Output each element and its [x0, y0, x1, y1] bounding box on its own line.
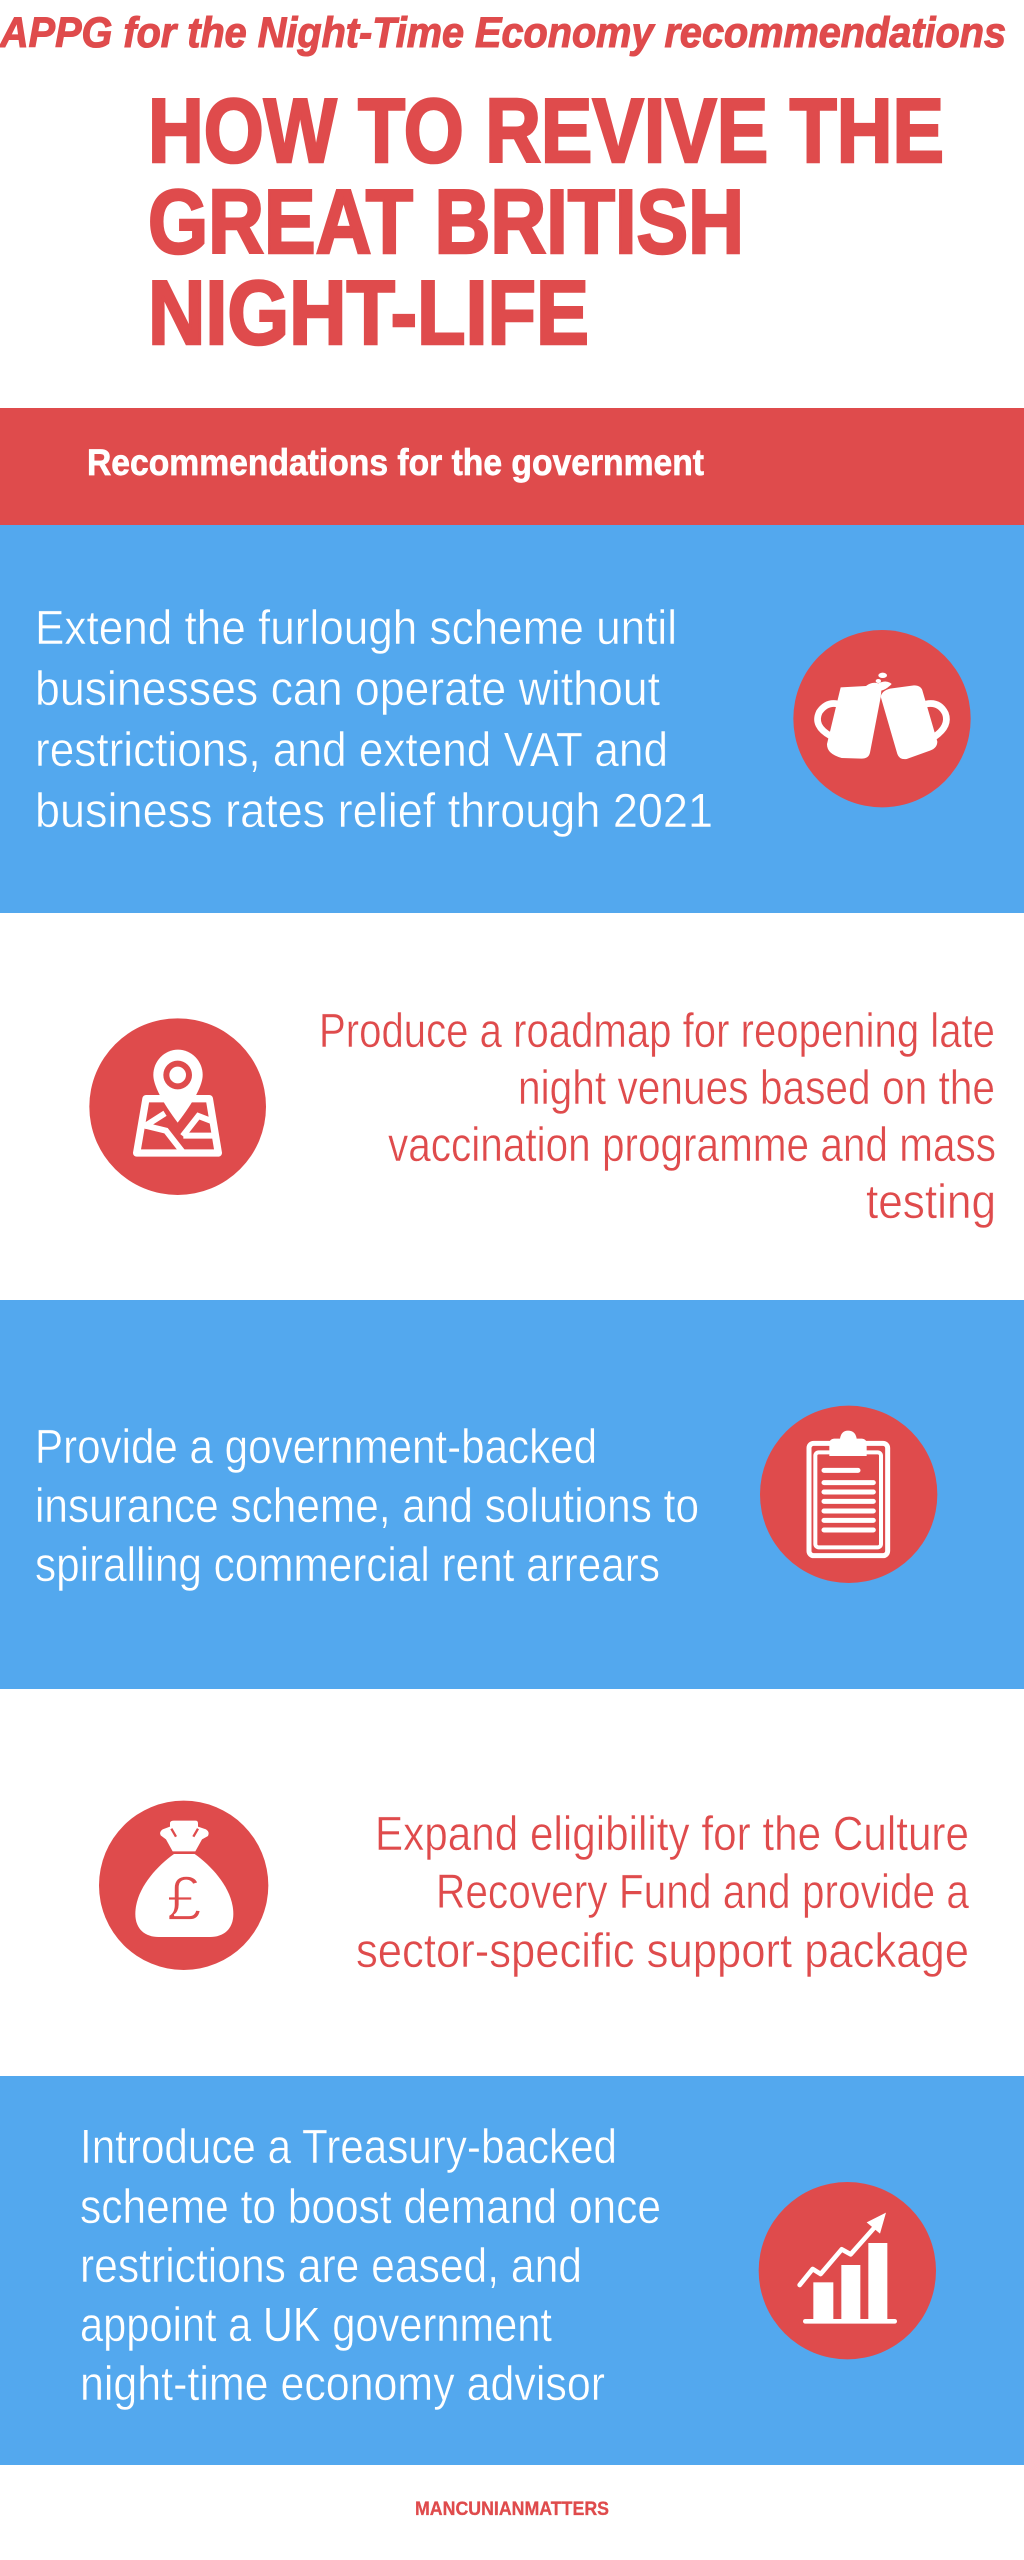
- text: furlough: business rates relief through 2021: [35, 785, 713, 838]
- panel: culture recovery fund recommendation: [99, 1801, 969, 1978]
- text: treasury scheme: restrictions are eased, and: [80, 2240, 582, 2293]
- text: treasury scheme: night-time economy advisor: [80, 2358, 605, 2411]
- text: furlough: Extend the furlough scheme until: [35, 602, 677, 655]
- icon: money bag: £: [166, 1864, 202, 1934]
- panel: roadmap recommendation: [89, 1005, 996, 1229]
- section heading: Recommendations for the government: [87, 442, 704, 483]
- text: treasury scheme: Introduce a Treasury-backed: [80, 2121, 617, 2174]
- text: insurance: spiralling commercial rent arrears: [35, 1539, 660, 1592]
- icon: clipboard: [760, 1406, 937, 1583]
- text: culture recovery fund: sector-specific support package: [356, 1925, 969, 1978]
- text: roadmap: [319, 1005, 996, 1229]
- text: roadmap: testing: [866, 1176, 996, 1229]
- text: furlough: [35, 602, 713, 838]
- panel: furlough recommendation: [0, 525, 1024, 913]
- text: culture recovery fund: [356, 1808, 969, 1978]
- title: [148, 81, 944, 364]
- title: NIGHT-LIFE: [148, 263, 589, 364]
- text: furlough: restrictions, and extend VAT and: [35, 724, 668, 777]
- icon: clinking beer mugs: [793, 630, 971, 807]
- text: insurance: Provide a government-backed: [35, 1421, 597, 1474]
- title: GREAT BRITISH: [148, 172, 744, 273]
- footer credit: MANCUNIANMATTERS: [415, 2499, 609, 2520]
- panel: treasury scheme recommendation: [0, 2076, 1024, 2465]
- text: furlough: businesses can operate without: [35, 663, 660, 716]
- text: insurance: [35, 1421, 699, 1592]
- text: treasury scheme: [80, 2121, 661, 2411]
- panel: section header: [0, 408, 1024, 525]
- text: insurance: insurance scheme, and solutions to: [35, 1480, 699, 1533]
- icon: rising bar chart: [759, 2182, 936, 2359]
- text: treasury scheme: scheme to boost demand once: [80, 2181, 661, 2234]
- panel: insurance recommendation: [0, 1300, 1024, 1689]
- text: treasury scheme: appoint a UK government: [80, 2299, 552, 2352]
- icon: map with pin: [89, 1018, 266, 1195]
- icon: money bag: [99, 1801, 268, 1970]
